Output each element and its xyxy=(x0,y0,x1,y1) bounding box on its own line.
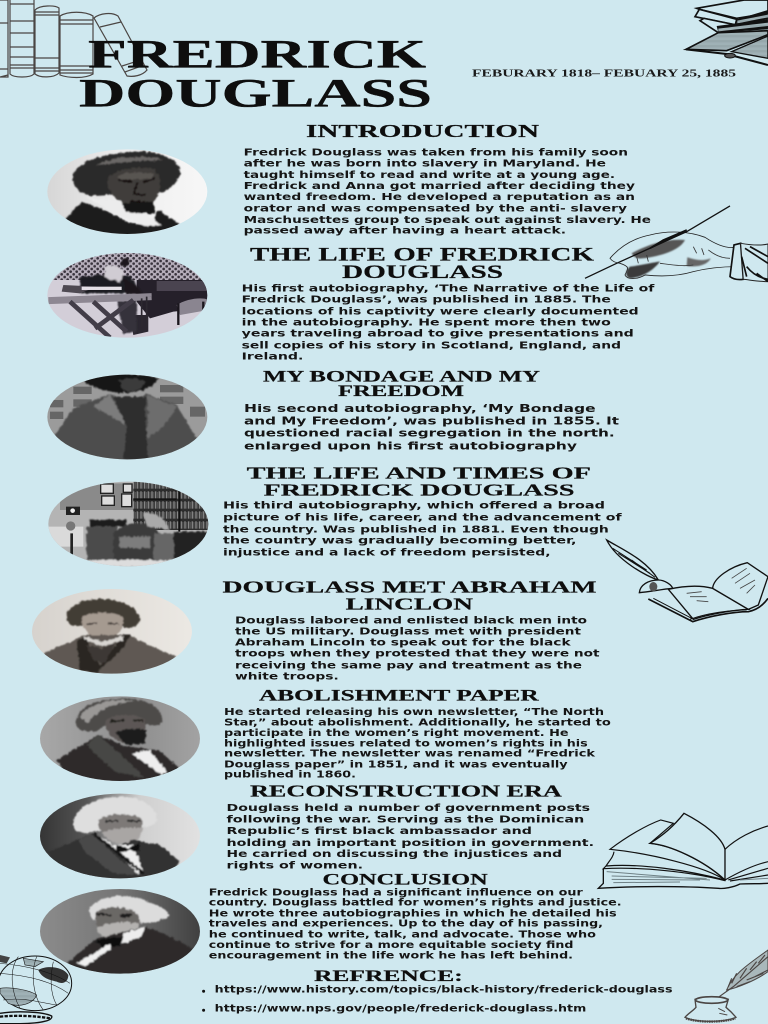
text: first autobiography: sell copies of his story in Scotland, England, and xyxy=(242,340,621,351)
text: first autobiography xyxy=(242,283,656,362)
text: conclusion: he continued to write, talk, and advocate. Those who xyxy=(209,929,597,940)
text: Lincoln meeting: the US military. Douglass met with president xyxy=(235,626,582,637)
text: introduction: orator and was compensated by the anti- slavery xyxy=(244,204,628,215)
photo: older Douglass portrait xyxy=(38,887,202,977)
text: abolishment paper: Douglass paper” in 1851, and it was eventually xyxy=(224,759,569,770)
heading: refrence: REFRENCE: xyxy=(314,966,463,985)
heading: my bondage and my freedom: MY BONDAGE AND MY xyxy=(263,368,541,385)
reference links: https://www.nps.gov/people/frederick-douglass.htm xyxy=(215,1004,586,1015)
photo: Douglass statue xyxy=(47,374,208,460)
heading: the life and times xyxy=(247,463,591,500)
photo: portrait of Douglass xyxy=(47,150,208,234)
text: third autobiography: the country was gradually becoming better, xyxy=(223,536,576,547)
text: conclusion: Fredrick Douglass had a significant influence on our xyxy=(209,887,583,898)
heading: introduction: INTRODUCTION xyxy=(306,121,539,141)
text: abolishment paper: Star,” about abolishment. Additionally, he started to xyxy=(224,717,611,728)
text: abolishment paper: published in 1860. xyxy=(224,770,356,781)
icon: hand holding quill xyxy=(585,206,768,282)
text: introduction xyxy=(244,148,652,237)
text: third autobiography xyxy=(223,501,623,558)
text: Lincoln meeting: troops when they protested that they were not xyxy=(235,649,600,660)
text: conclusion xyxy=(209,887,622,961)
text: introduction: taught himself to read and write at a young age. xyxy=(244,170,615,181)
heading: the life and times: FREDRICK DOUGLASS xyxy=(264,481,574,500)
text: third autobiography: picture of his life, career, and the advancement of xyxy=(223,513,623,524)
text: Lincoln meeting xyxy=(235,615,600,682)
text: conclusion: encouragement in the life work he has left behind. xyxy=(209,950,573,961)
text: reconstruction era: He carried on discussing the injustices and xyxy=(226,849,562,860)
text: first autobiography: in the autobiography. He spent more then two xyxy=(242,317,611,328)
text: abolishment paper xyxy=(224,707,611,781)
text: conclusion: country. Douglass battled for women’s rights and justice. xyxy=(209,898,622,909)
text: second autobiography: enlarged upon his first autobiography xyxy=(244,441,578,452)
text: reconstruction era: rights of women. xyxy=(226,861,363,872)
icon: stacked books top right xyxy=(686,0,768,65)
text: abolishment paper: newsletter. The newsletter was renamed “Fredrick xyxy=(224,749,596,760)
text: introduction: after he was born into slavery in Maryland. He xyxy=(244,159,607,170)
text: first autobiography: Fredrick Douglass’, was published in 1885. The xyxy=(242,295,611,306)
text: abolishment paper: participate in the women’s right movement. He xyxy=(224,728,569,739)
text: first autobiography: years traveling abroad to give presentations and xyxy=(242,329,634,340)
text: third autobiography: His third autobiography, which offered a broad xyxy=(223,501,605,512)
text: reconstruction era: holding an important position in government. xyxy=(226,838,594,849)
photo: Douglass middle-aged xyxy=(38,695,202,785)
heading: conclusion: CONCLUSION xyxy=(322,871,488,888)
icon: quill and open book xyxy=(607,540,768,622)
text: introduction: Maschusettes group to speak out against slavery. He xyxy=(244,215,652,226)
text: third autobiography: injustice and a lack of freedom persisted, xyxy=(223,547,550,558)
text: reconstruction era: following the war. Serving as the Dominican xyxy=(226,814,585,825)
text: abolishment paper: He started releasing his own newsletter, “The North xyxy=(224,707,604,718)
text: third autobiography: the country. Was published in 1881. Even though xyxy=(223,524,609,535)
title: DOUGLASS xyxy=(79,70,432,115)
text: second autobiography xyxy=(244,404,619,452)
text: second autobiography: questioned racial segregation in the north. xyxy=(244,429,615,440)
text: Lincoln meeting: white troops. xyxy=(235,671,339,682)
icon: large open book xyxy=(598,813,768,888)
text: conclusion: continue to strive for a more equitable society find xyxy=(209,940,574,951)
photo: young Douglass xyxy=(30,587,195,677)
text: first autobiography: His first autobiography, ‘The Narrative of the Life of xyxy=(242,283,656,294)
icon: row of books xyxy=(0,0,147,78)
heading: Douglass met Abraham Linclon xyxy=(222,578,597,613)
heading: my bondage and my freedom: FREEDOM xyxy=(338,383,464,400)
dates: FEBURARY 1818– FEBUARY 25, 1885 xyxy=(472,68,737,80)
text: first autobiography: Ireland. xyxy=(242,351,303,362)
text: conclusion: traveles and experiences. Up to the day of his passing, xyxy=(209,919,603,930)
text: introduction: Fredrick Douglass was taken from his family soon xyxy=(244,148,628,159)
heading: the life of Fredrick Douglass: THE LIFE OF FREDRICK xyxy=(250,245,595,266)
icon: globe xyxy=(0,955,72,1024)
title xyxy=(79,32,432,115)
reference links xyxy=(202,984,673,1015)
text: introduction: passed away after having a heart attack. xyxy=(244,226,566,237)
text: Lincoln meeting: Douglass labored and enlisted black men into xyxy=(235,615,588,626)
heading: Douglass met Abraham Linclon: LINCLON xyxy=(346,594,474,613)
text: second autobiography: and My Freedom’, was published in 1855. It xyxy=(244,416,619,427)
heading: the life of Fredrick Douglass: DOUGLASS xyxy=(342,262,503,283)
title: FREDRICK xyxy=(88,32,426,77)
reference links: https://www.history.com/topics/black-history/frederick-douglass xyxy=(215,984,673,995)
heading: abolishment paper: ABOLISHMENT PAPER xyxy=(259,688,539,705)
text: introduction: wanted freedom. He developed a reputation as an xyxy=(244,192,635,203)
text: conclusion: He wrote three autobiographies in which he detailed his xyxy=(209,908,617,919)
text: Lincoln meeting: receiving the same pay and treatment as the xyxy=(235,660,583,671)
text: abolishment paper: highlighted issues related to women’s rights in his xyxy=(224,739,588,750)
heading: my bondage and my freedom xyxy=(263,368,541,400)
text: reconstruction era xyxy=(226,803,594,872)
heading: the life and times: THE LIFE AND TIMES OF xyxy=(247,463,591,482)
icon: feather and inkwell xyxy=(685,950,768,1022)
photo: Douglass study xyxy=(47,480,213,568)
heading: Douglass met Abraham Linclon: DOUGLASS MET ABRAHAM xyxy=(222,578,597,597)
photo: older Douglass with bow tie xyxy=(38,792,202,883)
heading: reconstruction era: RECONSTRUCTION ERA xyxy=(250,782,562,801)
text: Lincoln meeting: Abraham Lincoln to speak out for the black xyxy=(235,638,571,649)
text: reconstruction era: Douglass held a number of government posts xyxy=(226,803,590,814)
text: first autobiography: locations of his captivity were clearly documented xyxy=(242,306,639,317)
text: second autobiography: His second autobiography, ‘My Bondage xyxy=(244,404,596,415)
photo: Douglass at a writing table xyxy=(43,252,213,340)
text: reconstruction era: Republic’s first black ambassador and xyxy=(226,826,532,837)
heading: the life of Fredrick Douglass xyxy=(250,245,595,283)
text: introduction: Fredrick and Anna got married after deciding they xyxy=(244,181,636,192)
